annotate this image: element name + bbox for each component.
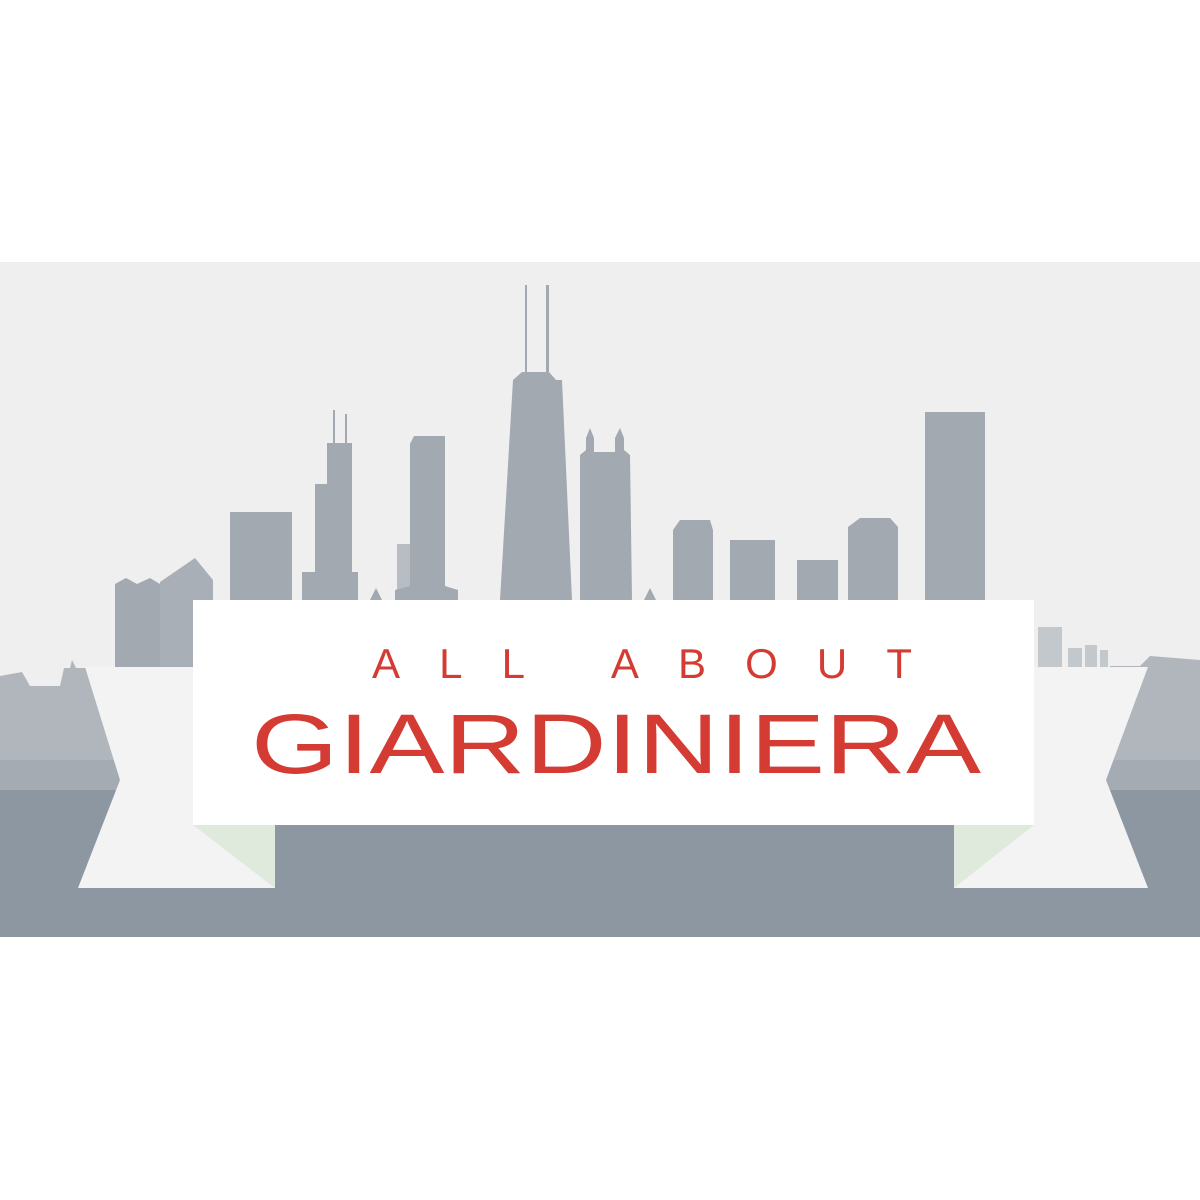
skyline [0,285,1200,790]
hancock [500,285,572,600]
background band [0,262,1200,790]
title: ALL ABOUT [372,640,912,687]
tribune [580,428,632,600]
aon [397,544,411,594]
ground band [0,788,1200,937]
ribbon: right tail [954,667,1148,888]
title: GIARDINIERA [251,697,981,791]
title [251,640,981,791]
banner [193,600,1034,825]
left haze [0,660,130,790]
right buildings [673,520,713,600]
ribbon: left tail [78,667,275,888]
willis [302,410,358,600]
left buildings [115,578,160,668]
right haze [1085,656,1200,790]
